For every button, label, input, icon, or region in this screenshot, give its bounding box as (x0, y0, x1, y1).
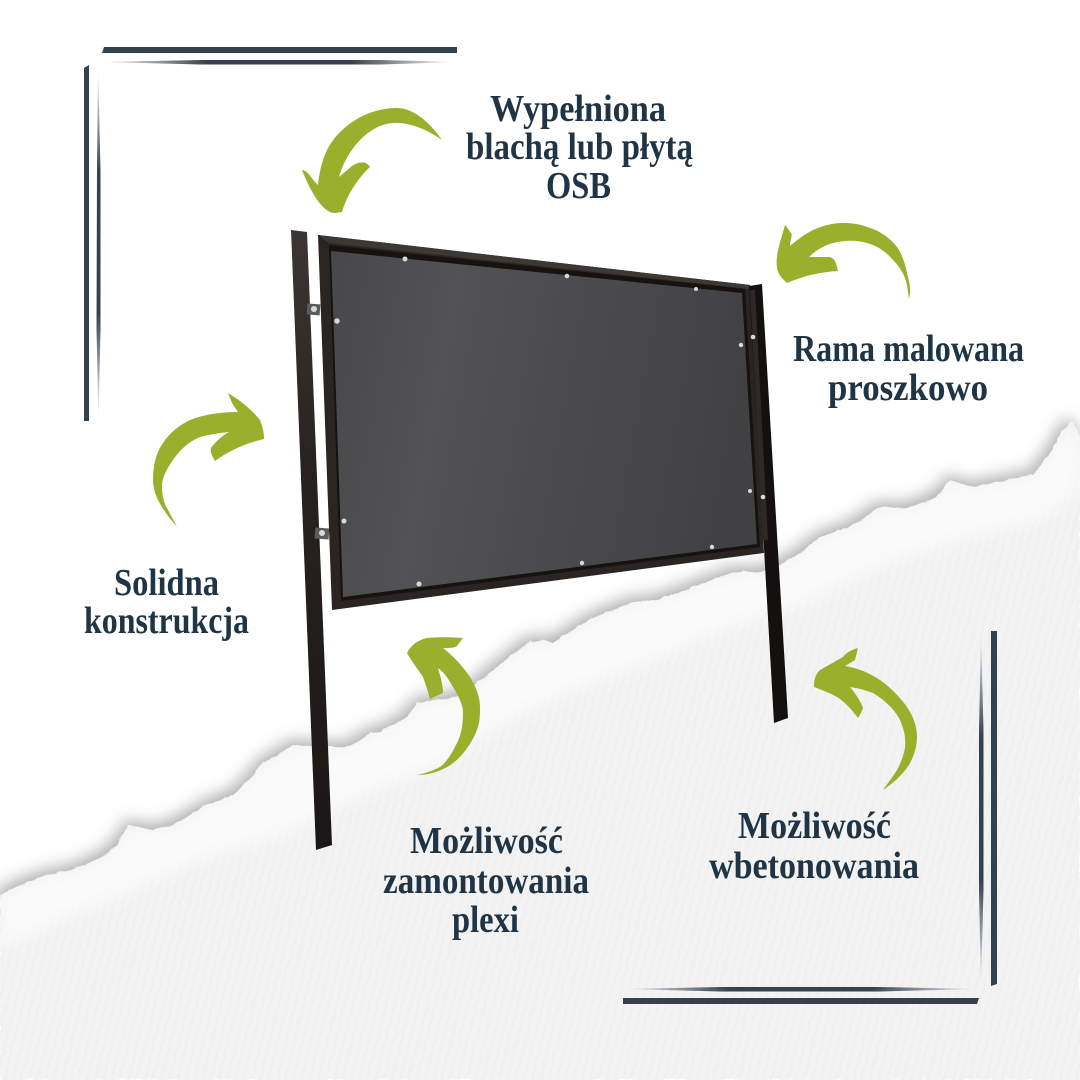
arrow: left (153, 393, 264, 527)
frame (318, 235, 764, 610)
caption: plexi option: Możliwość (410, 820, 563, 862)
caption: concreting option: Możliwość (738, 805, 891, 847)
caption: filled with sheet or OSB: Wypełniona (490, 88, 666, 130)
caption: concreting option (709, 805, 919, 887)
decorative corner: top left (84, 47, 457, 421)
panel bolts (334, 256, 765, 586)
caption: filled with sheet or OSB: blachą lub płytą (466, 126, 693, 168)
caption: powder coated frame (793, 328, 1024, 409)
caption: plexi option (383, 820, 589, 941)
decorative corner: bottom right (623, 631, 997, 1004)
frame top edge (318, 235, 750, 289)
caption: concreting option: wbetonowania (709, 845, 919, 887)
arrow: top (302, 108, 442, 213)
bottom mounting bracket (315, 528, 329, 539)
dark panel (331, 251, 757, 597)
torn paper background (0, 417, 1080, 1080)
top mounting bracket (307, 304, 320, 315)
arrow: upper right (777, 223, 910, 299)
inner shadow line (329, 245, 760, 601)
caption: filled with sheet or OSB (466, 88, 693, 207)
caption: solid construction: Solidna (114, 562, 219, 604)
caption: powder coated frame: proszkowo (828, 367, 988, 409)
caption: powder coated frame: Rama malowana (793, 328, 1024, 370)
board on stand (291, 230, 788, 850)
right post (749, 284, 788, 723)
caption: plexi option: plexi (452, 899, 519, 941)
right post highlight (750, 290, 768, 540)
caption: filled with sheet or OSB: OSB (546, 165, 611, 207)
caption: solid construction (84, 562, 249, 642)
left post (291, 230, 332, 850)
caption: solid construction: konstrukcja (84, 600, 249, 642)
caption: plexi option: zamontowania (383, 860, 589, 902)
arrow: bottom centre (407, 637, 480, 775)
arrow: bottom right (814, 648, 917, 790)
